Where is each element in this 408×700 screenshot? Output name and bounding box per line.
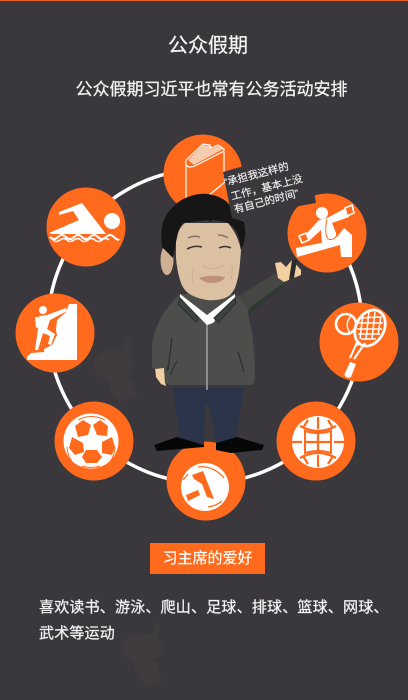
subtitle: 公众假期习近平也常有公务活动安排	[76, 80, 348, 99]
badge: 习主席的爱好	[162, 550, 252, 567]
speech bubble: 工作，基本上没	[229, 172, 304, 203]
badge	[150, 543, 265, 574]
speech bubble	[222, 148, 316, 218]
hobbies text: 武术等运动	[39, 625, 115, 642]
hobbies text: 喜欢读书、游泳、爬山、足球、排球、篮球、网球、	[39, 599, 389, 616]
icon: volleyball	[166, 442, 246, 520]
icon: football	[54, 402, 134, 480]
ear	[160, 245, 174, 275]
raised arm	[237, 273, 284, 320]
pants	[173, 388, 244, 445]
features	[188, 235, 228, 238]
icon: martial arts	[288, 194, 366, 272]
jacket	[152, 294, 255, 385]
watermark: faint rabbits	[93, 337, 162, 686]
shoes	[154, 437, 264, 453]
character: Xi cartoon figure	[152, 194, 301, 453]
title: 公众假期	[168, 35, 248, 57]
icon: swimming	[46, 188, 126, 266]
ring	[48, 169, 362, 483]
speech bubble: “承担我这样的	[222, 160, 290, 189]
icon: globe	[276, 402, 356, 480]
shirt collar	[180, 294, 235, 325]
hair	[161, 194, 245, 258]
hand and phone	[275, 260, 301, 282]
left hand	[155, 367, 166, 386]
icon: climbing	[16, 294, 94, 372]
icon: book	[164, 134, 242, 214]
face	[176, 223, 241, 300]
hobbies text	[39, 599, 389, 642]
speech bubble: 有自己的时间”	[232, 187, 301, 216]
icon: tennis	[320, 302, 398, 382]
